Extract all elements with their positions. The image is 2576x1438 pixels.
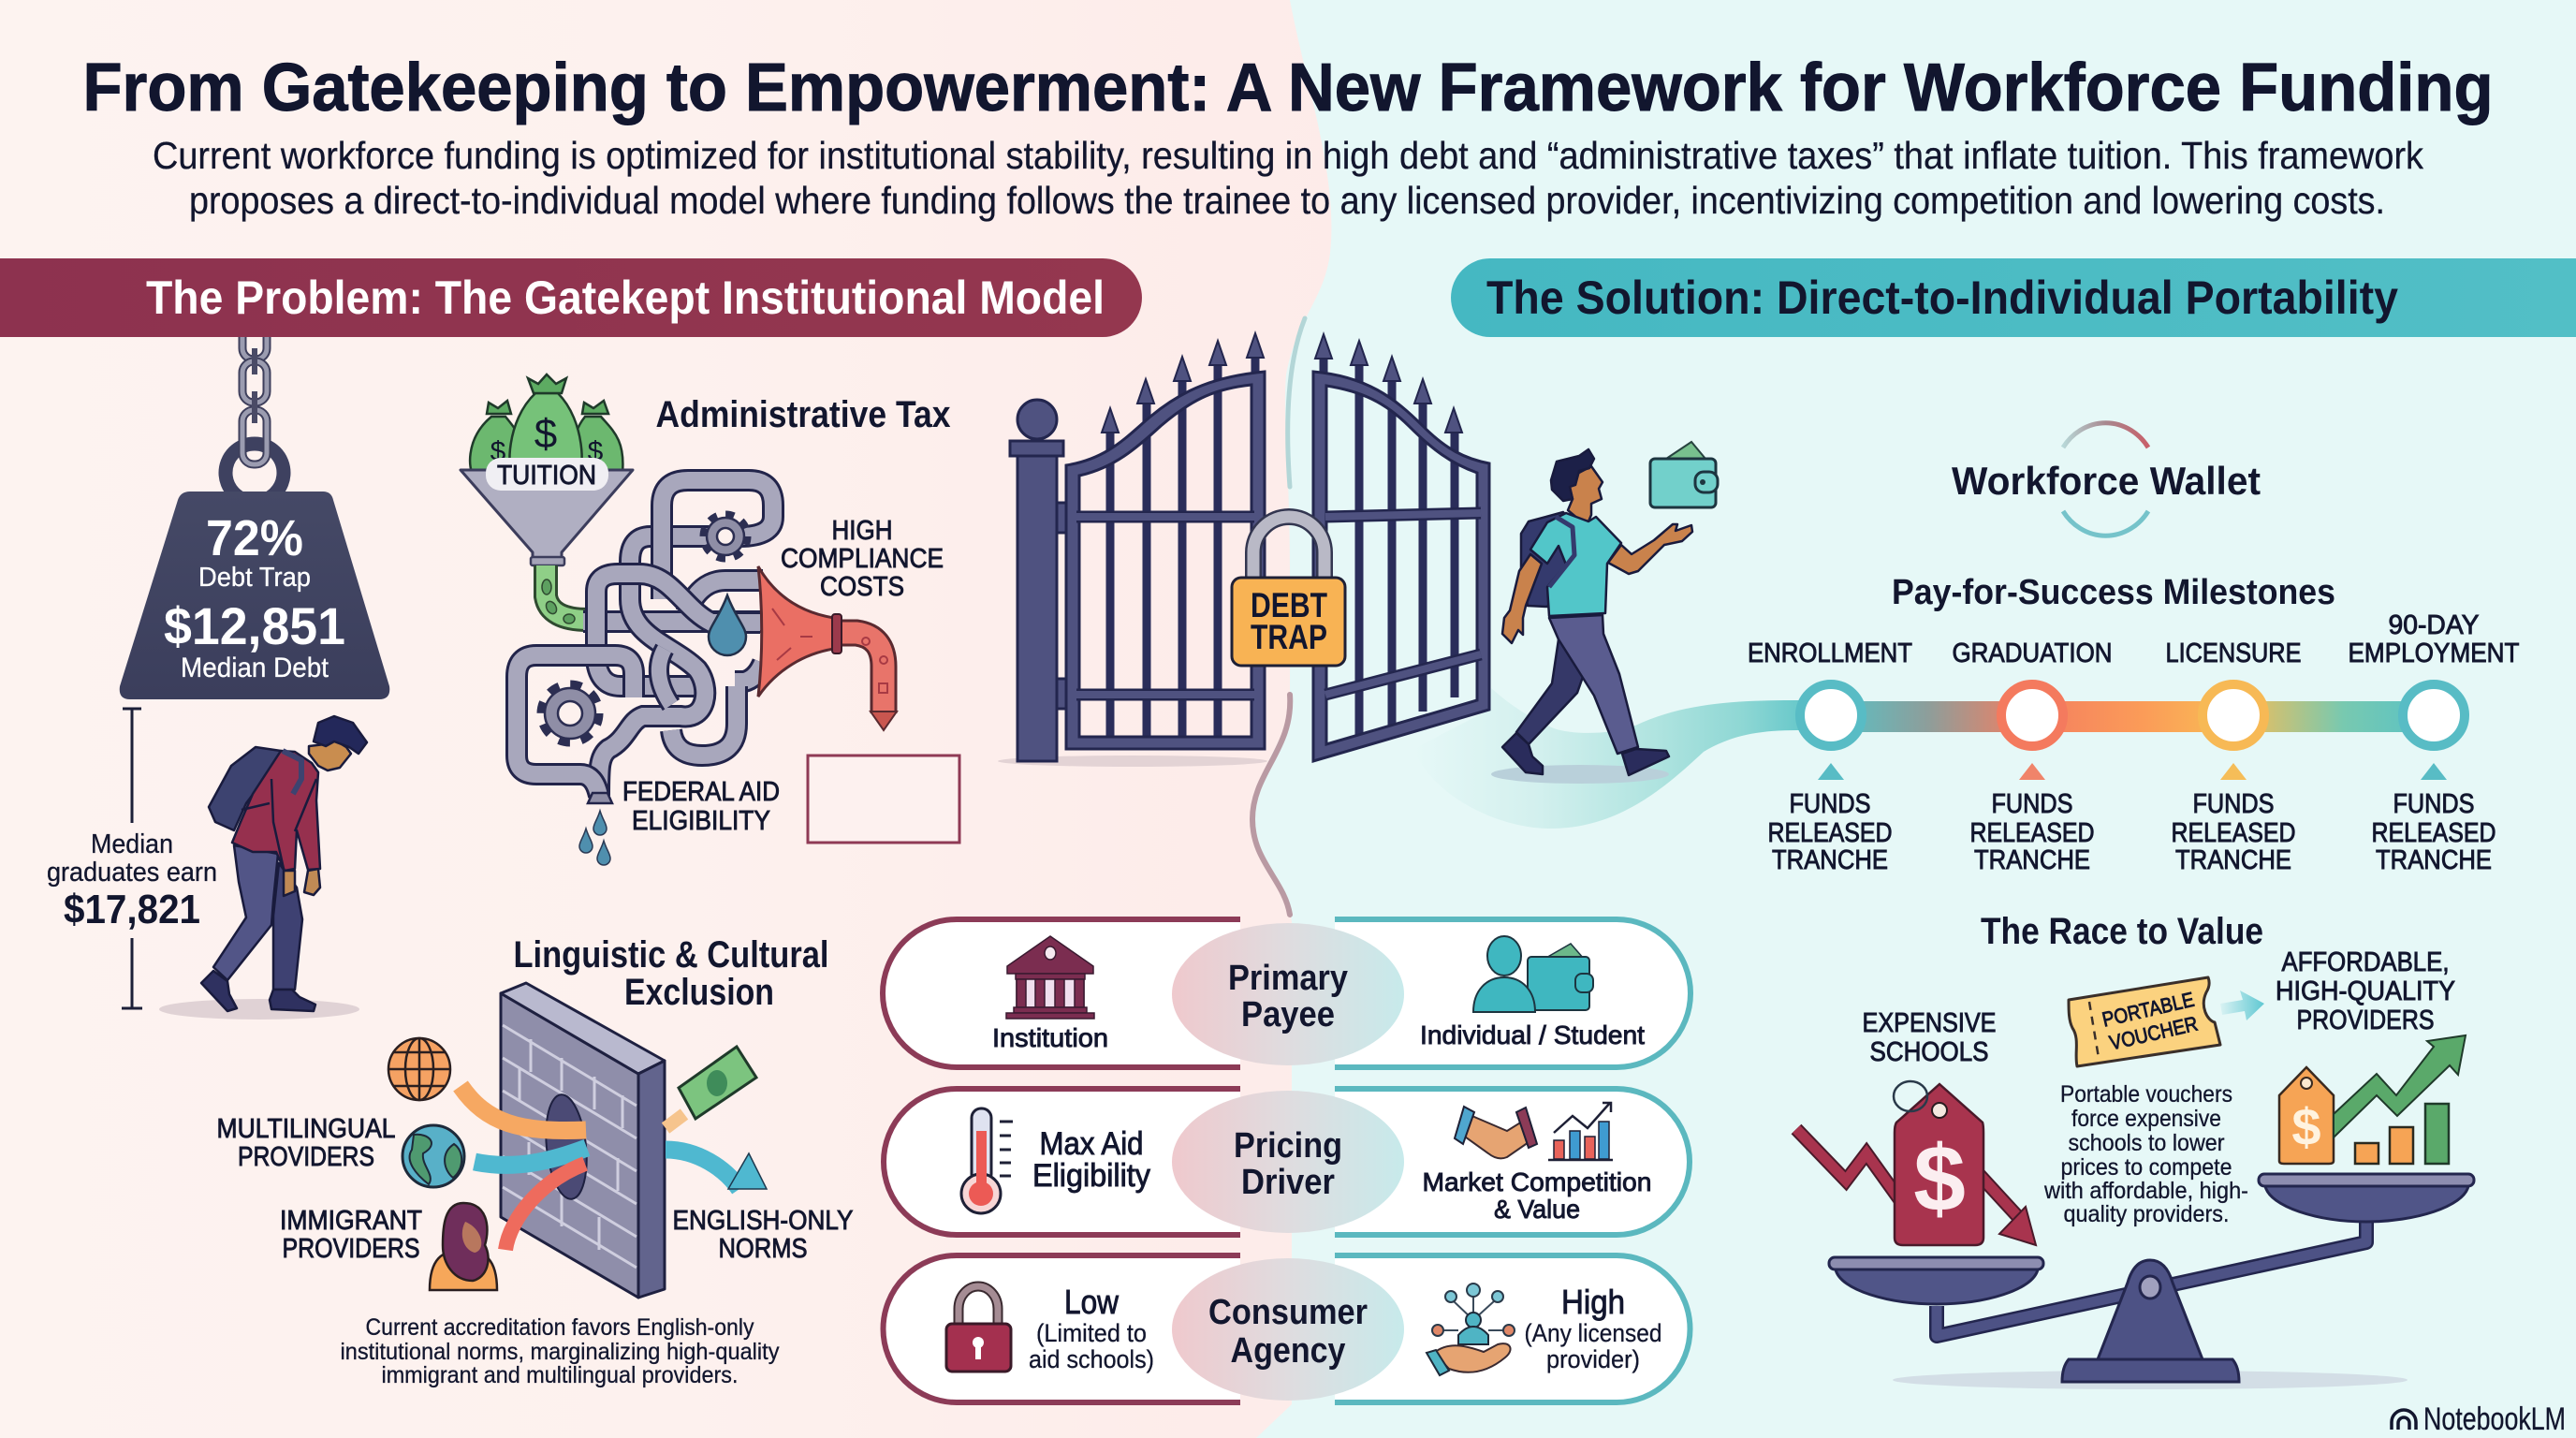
icon: thermometer — [961, 1108, 1013, 1213]
left gate post — [1010, 400, 1066, 761]
figure: walking student — [1491, 449, 1692, 784]
subtitle — [153, 134, 2423, 222]
bracket: median earnings — [47, 709, 217, 1008]
label: federal aid eligibility — [622, 777, 780, 836]
icon: funnel — [461, 458, 633, 624]
label: expensive schools: SCHOOLS — [1870, 1037, 1988, 1067]
milestone: enrollment: FUNDS — [1790, 789, 1870, 819]
icon: money bill — [666, 1047, 756, 1128]
label: affordable high-quality providers — [2276, 947, 2455, 1035]
banner: the solution — [1451, 258, 2576, 337]
row: primary payee — [883, 919, 1690, 1067]
row: pricing driver: Market Competition — [1423, 1167, 1651, 1196]
heading: pay-for-success milestones: Pay-for-Success Milestones — [1892, 573, 2335, 612]
text: voucher explanation: quality providers. — [2063, 1201, 2230, 1227]
icon: red price tag: $ — [1913, 1126, 1966, 1231]
label: immigrant providers — [280, 1206, 422, 1264]
weight text: Median Debt — [181, 653, 329, 683]
subtitle: proposes a direct-to-individual model where funding follows the trainee to any licensed provider, incentivizing competition and lowering costs. — [189, 179, 2385, 222]
milestone: 90-day employment — [2348, 610, 2520, 875]
icon: funnel: TUITION — [497, 461, 596, 491]
heading: administrative tax: Administrative Tax — [655, 394, 951, 435]
padlock: debt trap — [1232, 517, 1345, 666]
background: solution side — [1252, 0, 2576, 1438]
row: consumer agency: Agency — [1230, 1331, 1346, 1371]
bracket: median earnings: Median — [91, 829, 173, 859]
row: pricing driver: Max Aid — [1039, 1126, 1144, 1162]
icon: rising green chart — [2334, 1035, 2466, 1164]
weight text — [164, 510, 345, 683]
icon: tangled pipes — [517, 480, 773, 803]
row: consumer agency: (Limited to — [1036, 1319, 1147, 1347]
row: primary payee: Payee — [1241, 995, 1335, 1034]
text: voucher explanation: with affordable, high- — [2043, 1178, 2248, 1204]
arrow: orange into wall — [461, 1086, 586, 1130]
comparison table — [883, 919, 1690, 1402]
seam lines between sides — [1252, 318, 1305, 915]
debt weight with chain — [120, 324, 389, 699]
banner: the problem: The Problem: The Gatekept Institutional Model — [146, 271, 1105, 324]
label: affordable high-quality providers: PROVIDERS — [2297, 1005, 2434, 1035]
label: expensive schools: EXPENSIVE — [1863, 1008, 1996, 1038]
milestone: licensure — [2166, 638, 2301, 875]
left gate leaf — [1066, 333, 1265, 749]
arrow: blue out of wall — [666, 1150, 767, 1189]
heading: workforce wallet: Workforce Wallet — [1952, 459, 2261, 503]
ribbon path to milestones — [1413, 688, 1835, 829]
row: consumer agency: (Any licensed — [1524, 1319, 1662, 1347]
icon: money bags — [470, 374, 622, 473]
right gate leaf — [1313, 334, 1489, 761]
subtitle: Current workforce funding is optimized for institutional stability, resulting in high debt and “administrative taxes” that inflate tuition. This framework — [153, 134, 2423, 177]
heading: the race to value: The Race to Value — [1981, 911, 2263, 952]
row: primary payee: Primary — [1228, 959, 1348, 998]
row: consumer agency: High — [1561, 1283, 1625, 1321]
icon: red price tag — [1894, 1081, 1983, 1245]
green tuition pipe — [542, 565, 588, 624]
arrow: voucher to providers — [2220, 990, 2264, 1020]
icon: hand holding network — [1427, 1284, 1515, 1375]
milestone: licensure: TRANCHE — [2175, 845, 2291, 875]
weight text: 72% — [206, 510, 303, 566]
row: pricing driver: Pricing — [1234, 1126, 1342, 1166]
bracket: median earnings: graduates earn — [47, 858, 217, 888]
gate with padlock — [998, 333, 1489, 767]
label: affordable high-quality providers: HIGH-QUALITY — [2276, 976, 2455, 1006]
icon: balance scale — [1829, 1174, 2474, 1389]
icon: money bags: $ — [534, 411, 557, 457]
row: pricing driver: Driver — [1241, 1163, 1335, 1202]
label: multilingual providers: MULTILINGUAL — [217, 1114, 395, 1144]
label: high compliance costs: COMPLIANCE — [781, 544, 944, 574]
row: consumer agency — [884, 1255, 1690, 1402]
row: primary payee: Institution — [992, 1023, 1108, 1052]
label: affordable high-quality providers: AFFORDABLE, — [2282, 947, 2449, 977]
heading: linguistic and cultural exclusion — [513, 934, 829, 1013]
milestone: 90-day employment: FUNDS — [2393, 789, 2475, 819]
figure: burdened graduate — [159, 716, 367, 1020]
label: immigrant providers: PROVIDERS — [283, 1234, 419, 1264]
icon: orange price tag: $ — [2291, 1097, 2321, 1156]
label: expensive schools — [1863, 1008, 1996, 1067]
row: pricing driver: Eligibility — [1032, 1158, 1150, 1194]
weight body — [120, 492, 389, 699]
bracket: median earnings: $17,821 — [64, 887, 200, 932]
background: problem side — [0, 0, 1348, 1438]
milestone: graduation: GRADUATION — [1953, 638, 2112, 668]
label: english-only norms — [672, 1206, 854, 1264]
text: accreditation note: Current accreditation favors English-only — [365, 1314, 754, 1341]
icon: brick wall — [501, 983, 665, 1298]
milestone: graduation: FUNDS — [1992, 789, 2072, 819]
icon: money bags: $ — [588, 436, 604, 467]
heading: linguistic and cultural exclusion: Exclusion — [624, 972, 774, 1013]
padlock: debt trap: TRAP — [1251, 618, 1327, 656]
icon: gear lower — [543, 686, 597, 741]
icon: earth globe — [402, 1125, 464, 1187]
icon: locked padlock — [946, 1286, 1011, 1372]
milestone: 90-day employment: TRANCHE — [2376, 845, 2492, 875]
text: voucher explanation: force expensive — [2071, 1106, 2221, 1132]
label: federal aid eligibility: FEDERAL AID — [622, 777, 780, 807]
heading: linguistic and cultural exclusion: Linguistic & Cultural — [513, 934, 829, 976]
icon: money bags: $ — [490, 436, 506, 467]
milestone: graduation: RELEASED — [1969, 818, 2095, 848]
icon: drips — [579, 811, 610, 865]
milestone: enrollment: ENROLLMENT — [1748, 638, 1912, 668]
text: accreditation note: immigrant and multilingual providers. — [382, 1362, 738, 1388]
row: consumer agency: Consumer — [1208, 1293, 1368, 1332]
row: consumer agency: aid schools) — [1029, 1345, 1154, 1373]
icon: gear upper — [705, 516, 746, 557]
section: administrative tax — [461, 374, 959, 865]
label: high compliance costs: COSTS — [820, 572, 904, 602]
arrow: red into wall — [505, 1164, 585, 1250]
row: consumer agency: provider) — [1546, 1345, 1640, 1373]
icon: orange globe — [388, 1038, 450, 1100]
icon: red outlet horn — [758, 566, 897, 730]
chain — [242, 324, 267, 464]
section: linguistic and cultural exclusion — [217, 934, 854, 1388]
row: primary payee: Individual / Student — [1420, 1020, 1645, 1049]
label: immigrant providers: IMMIGRANT — [280, 1206, 422, 1236]
milestone: graduation: TRANCHE — [1974, 845, 2090, 875]
icon: wallet in hand — [1650, 442, 1718, 507]
icon: handshake — [1455, 1107, 1537, 1158]
milestone: licensure: LICENSURE — [2166, 638, 2301, 668]
icon: institution — [1006, 936, 1094, 1019]
text: accreditation note: institutional norms, marginalizing high-quality — [341, 1339, 780, 1365]
title: From Gatekeeping to Empowerment: A New Framework for Workforce Funding — [82, 51, 2494, 125]
milestone: 90-day employment: RELEASED — [2372, 818, 2496, 848]
text: voucher explanation: Portable vouchers — [2060, 1081, 2232, 1108]
row: pricing driver — [884, 1089, 1690, 1235]
milestone: enrollment — [1748, 638, 1912, 875]
milestone: 90-day employment: EMPLOYMENT — [2348, 638, 2520, 668]
milestone timeline — [1748, 610, 2520, 875]
heading: workforce wallet — [1952, 423, 2261, 536]
weight ring — [226, 444, 284, 502]
empty callout box — [808, 756, 959, 843]
icon: portable voucher: VOUCHER — [2107, 1012, 2200, 1054]
label: high compliance costs: HIGH — [831, 516, 893, 546]
tuition label — [486, 458, 608, 491]
row: consumer agency: Low — [1064, 1283, 1120, 1321]
row: pricing driver: & Value — [1494, 1195, 1580, 1224]
milestone: licensure: RELEASED — [2172, 818, 2295, 848]
text: voucher explanation — [2043, 1081, 2248, 1227]
icon: rising bar chart — [1548, 1103, 1613, 1160]
icon: orange price tag — [2279, 1067, 2334, 1164]
padlock: debt trap: DEBT — [1251, 586, 1327, 624]
label: english-only norms: ENGLISH-ONLY — [672, 1206, 854, 1236]
arrow: falling red price — [1796, 1129, 2036, 1245]
icon: individual with wallet — [1473, 936, 1593, 1012]
section: the race to value — [1796, 911, 2474, 1389]
icon: portable voucher — [2069, 977, 2220, 1066]
label: english-only norms: NORMS — [719, 1234, 807, 1264]
weight text: Debt Trap — [198, 563, 311, 593]
milestone: licensure: FUNDS — [2192, 789, 2275, 819]
milestone: enrollment: RELEASED — [1767, 818, 1893, 848]
icon: woman in hijab — [430, 1203, 497, 1290]
arrow: blue into wall — [475, 1148, 587, 1165]
text: voucher explanation: schools to lower — [2069, 1130, 2224, 1156]
milestone: enrollment: TRANCHE — [1772, 845, 1888, 875]
milestone: graduation — [1953, 638, 2112, 875]
banner: the problem — [0, 258, 1142, 337]
label: multilingual providers: PROVIDERS — [238, 1142, 374, 1172]
weight text: $12,851 — [164, 596, 345, 655]
icon: blue droplet — [709, 595, 746, 655]
label: high compliance costs — [781, 516, 944, 602]
banner: the solution: The Solution: Direct-to-Individual Portability — [1486, 271, 2398, 324]
milestone: 90-day employment: 90-DAY — [2389, 610, 2479, 640]
icon: portable voucher: PORTABLE — [2100, 988, 2196, 1032]
text: voucher explanation: prices to compete — [2061, 1154, 2232, 1181]
text: accreditation note — [341, 1314, 780, 1388]
label: multilingual providers — [217, 1114, 395, 1172]
label: federal aid eligibility: ELIGIBILITY — [632, 806, 770, 836]
